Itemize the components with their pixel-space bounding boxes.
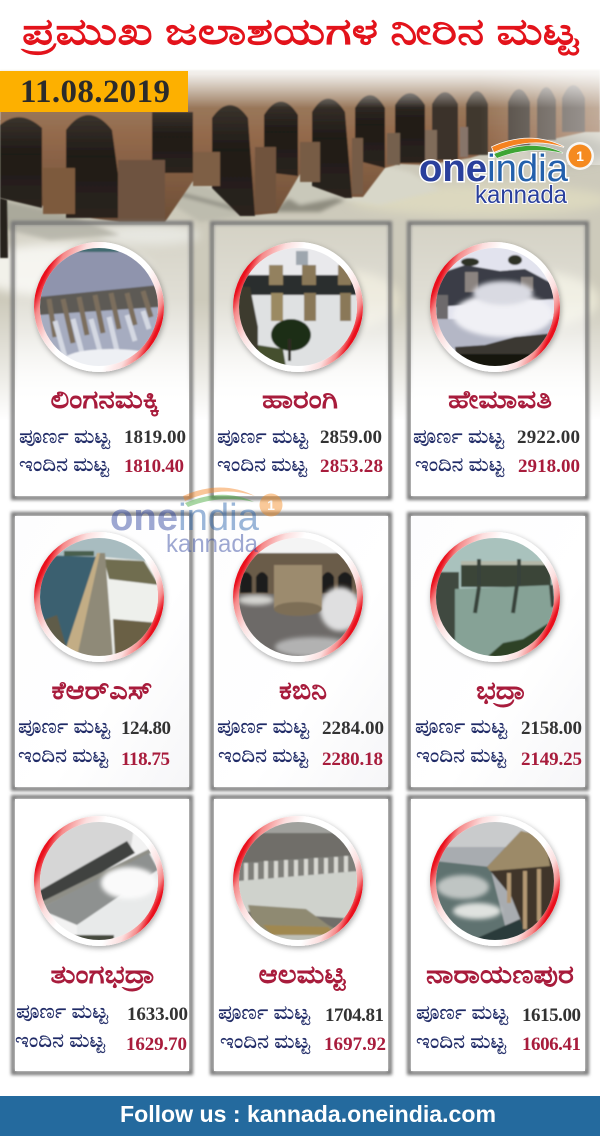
today level row — [218, 745, 383, 770]
footer bar: Follow us : kannada.oneindia.com — [120, 1101, 496, 1127]
today level row — [416, 745, 582, 770]
today level row — [18, 745, 170, 770]
today level row: 2280.18 — [322, 749, 383, 770]
photo: Hemavathi dam — [430, 242, 560, 372]
hero photo: dam with arches and water — [0, 56, 600, 420]
today level row — [217, 454, 383, 477]
watermark: oneindia kannada: oneindia — [110, 497, 260, 539]
panel: Hemavathi — [409, 223, 587, 498]
photo: Harangi dam — [233, 242, 363, 372]
logo: oneindia kannada — [419, 138, 594, 209]
panel: KRS — [13, 514, 191, 789]
today level row: 118.75 — [121, 749, 170, 770]
logo: oneindia kannada: 1 — [576, 148, 584, 164]
today level row: ಇಂದಿನ ಮಟ್ಟ — [19, 454, 110, 477]
logo: oneindia kannada: oneindia — [419, 148, 569, 190]
today level row: ಇಂದಿನ ಮಟ್ಟ — [18, 745, 109, 768]
photo: KRS dam — [34, 532, 164, 662]
full level row: 2922.00 — [517, 427, 580, 448]
today level row: 2853.28 — [320, 456, 383, 477]
today level row: 2918.00 — [518, 456, 580, 477]
watermark: oneindia kannada: kannada — [166, 530, 258, 558]
full level row — [18, 716, 171, 739]
panel: Narayanapura — [409, 797, 587, 1073]
full level row: ಪೂರ್ಣ ಮಟ್ಟ — [217, 716, 310, 739]
full level row — [416, 1002, 581, 1026]
full level row: ಪೂರ್ಣ ಮಟ್ಟ — [18, 716, 111, 739]
full level row: ಪೂರ್ಣ ಮಟ್ಟ — [416, 1002, 509, 1025]
full level row — [19, 426, 186, 449]
full level row: ಪೂರ್ಣ ಮಟ್ಟ — [16, 1001, 109, 1024]
full level row: 1633.00 — [127, 1004, 188, 1025]
today level row — [19, 454, 184, 477]
full level row — [413, 426, 580, 449]
photo: Linganamakki dam — [34, 242, 164, 372]
today level row — [15, 1030, 187, 1055]
photo: Tungabhadra dam — [34, 816, 164, 946]
full level row: 2158.00 — [521, 718, 582, 739]
full level row — [217, 426, 382, 449]
full level row — [217, 716, 384, 739]
panel: Harangi — [212, 223, 390, 498]
full level row — [415, 716, 582, 739]
watermark: oneindia kannada: 1 — [267, 497, 275, 513]
today level row: 1697.92 — [324, 1034, 386, 1055]
name: Harangi: ಹಾರಂಗಿ — [262, 387, 338, 414]
today level row: 2149.25 — [521, 749, 582, 770]
date banner: 11.08.2019 — [20, 74, 170, 110]
today level row: ಇಂದಿನ ಮಟ್ಟ — [416, 745, 507, 768]
full level row: 1704.81 — [325, 1005, 384, 1026]
full level row: 1819.00 — [124, 427, 186, 448]
full level row: ಪೂರ್ಣ ಮಟ್ಟ — [415, 716, 508, 739]
panel: Kabini — [212, 514, 390, 789]
panel: Almatti — [212, 797, 390, 1073]
panel: Bhadra — [409, 514, 587, 789]
photo: Almatti dam — [233, 816, 363, 946]
full level row: 124.80 — [121, 718, 171, 739]
today level row — [220, 1031, 386, 1055]
title: ಪ್ರಮುಖ ಜಲಾಶಯಗಳ ನೀರಿನ ಮಟ್ಟ — [19, 12, 580, 56]
full level row: ಪೂರ್ಣ ಮಟ್ಟ — [217, 426, 309, 449]
footer bar — [0, 1096, 600, 1136]
full level row: 2859.00 — [320, 427, 382, 448]
full level row: 2284.00 — [322, 718, 384, 739]
full level row — [16, 1001, 188, 1025]
logo: oneindia kannada: kannada — [475, 181, 567, 209]
watermark: oneindia kannada — [110, 488, 282, 558]
name: Hemavathi: ಹೇಮಾವತಿ — [448, 387, 552, 414]
name: Tungabhadra: ತುಂಗಭದ್ರಾ — [50, 962, 156, 992]
today level row: ಇಂದಿನ ಮಟ್ಟ — [416, 1031, 507, 1054]
photo: Kabini dam — [233, 532, 363, 662]
name: Narayanapura: ನಾರಾಯಣಪುರ — [426, 962, 574, 989]
today level row: 1810.40 — [124, 456, 184, 477]
today level row: ಇಂದಿನ ಮಟ್ಟ — [220, 1031, 311, 1054]
full level row: ಪೂರ್ಣ ಮಟ್ಟ — [19, 426, 111, 449]
name: KRS: ಕೆಆರ್‌ಎಸ್ — [52, 678, 152, 705]
today level row: ಇಂದಿನ ಮಟ್ಟ — [15, 1030, 106, 1053]
today level row: ಇಂದಿನ ಮಟ್ಟ — [415, 454, 505, 477]
today level row: 1606.41 — [522, 1034, 581, 1055]
today level row: ಇಂದಿನ ಮಟ್ಟ — [218, 745, 309, 768]
panel: Tungabhadra — [13, 797, 191, 1073]
full level row — [218, 1002, 384, 1026]
today level row — [415, 454, 580, 477]
name: Kabini: ಕಬಿನಿ — [279, 678, 327, 705]
full level row: ಪೂರ್ಣ ಮಟ್ಟ — [413, 426, 505, 449]
name: Bhadra: ಭದ್ರಾ — [476, 678, 526, 708]
photo: Narayanapura dam — [430, 816, 560, 946]
name: Linganamakki: ಲಿಂಗನಮಕ್ಕಿ — [50, 387, 160, 418]
panel: Linganamakki — [13, 223, 191, 498]
photo: Bhadra dam — [430, 532, 560, 662]
full level row: 1615.00 — [522, 1005, 581, 1026]
today level row: 1629.70 — [126, 1034, 187, 1055]
name: Almatti: ಆಲಮಟ್ಟಿ — [258, 962, 347, 991]
full level row: ಪೂರ್ಣ ಮಟ್ಟ — [218, 1002, 311, 1025]
today level row — [416, 1031, 581, 1055]
today level row: ಇಂದಿನ ಮಟ್ಟ — [217, 454, 308, 477]
